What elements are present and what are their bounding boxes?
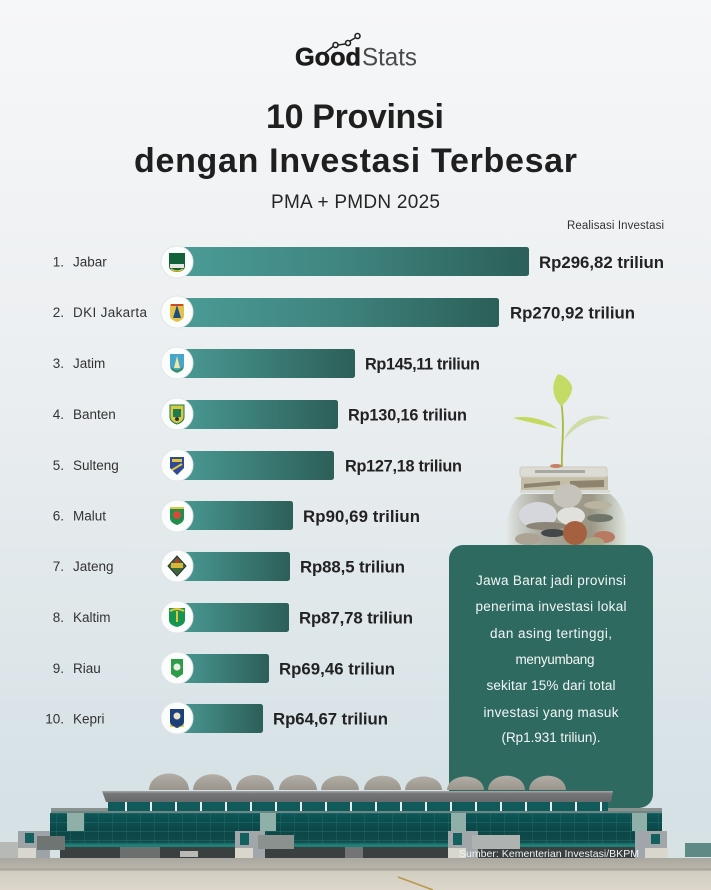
jar lid rim [520, 467, 607, 477]
row 2: DKI Jakarta: 2. [53, 305, 64, 320]
row 7: Jateng: Jateng [73, 559, 114, 574]
row 8: Kaltim: 8. [53, 610, 64, 625]
icon: Kepri emblem [170, 709, 184, 728]
plant [513, 374, 610, 467]
row 2: DKI Jakarta: DKI Jakarta [73, 305, 147, 320]
logo wordmark: Stats: Stats [362, 44, 417, 72]
row 5: Sulteng: Sulteng [73, 458, 119, 473]
glass facade [50, 813, 662, 847]
row 3: Jatim [53, 347, 480, 379]
logo: GoodStats [295, 34, 417, 72]
row 5: Sulteng: 5. [53, 458, 64, 473]
row 8: Kaltim: Rp87,78 triliun [299, 608, 413, 628]
title [134, 98, 577, 180]
row 7: Jateng: 7. [53, 559, 64, 574]
row 1: Jabar [53, 246, 664, 278]
icon: Jatim emblem [170, 354, 184, 373]
row 3: Jatim: Jatim [73, 356, 105, 371]
image: coin jar with plant [505, 374, 628, 547]
apron ground [0, 858, 711, 890]
roof domes [149, 774, 566, 790]
subtitle: PMA + PMDN 2025 [271, 192, 440, 213]
row 4: Banten: Banten [73, 407, 116, 422]
row 9: Riau: Rp69,46 triliun [279, 660, 395, 678]
bar chart [45, 246, 664, 734]
jar body [505, 494, 628, 546]
callout text: (Rp1.931 triliun). [502, 730, 600, 745]
row 9: Riau [53, 652, 395, 684]
callout text: sekitar 15% dari total [486, 678, 616, 693]
callout text: penerima investasi lokal [476, 599, 626, 614]
row 4: Banten: Rp130,16 triliun [348, 406, 467, 424]
row 6: Malut [53, 500, 420, 532]
image: airport terminal [0, 774, 711, 890]
row 8: Kaltim: Kaltim [73, 610, 111, 625]
facade pillars [67, 813, 647, 831]
callout text: investasi yang masuk [484, 705, 619, 720]
gate blocks and jet bridges [18, 831, 668, 858]
clerestory windows [108, 801, 608, 812]
row 1: Jabar: Rp296,82 triliun [539, 253, 664, 272]
side buildings [0, 842, 18, 858]
panel: Jawa Barat callout [449, 545, 653, 808]
icon: Sulteng emblem [170, 457, 184, 475]
row 4: Banten: 4. [53, 407, 64, 422]
row 7: Jateng [53, 550, 405, 582]
row 1: Jabar: Jabar [73, 254, 107, 270]
source note: Sumber: Kementerian Investasi/BKPM [459, 848, 639, 860]
icon: Riau emblem [171, 659, 183, 678]
row 1: Jabar: 1. [53, 254, 64, 270]
row 3: Jatim: Rp145,11 triliun [365, 356, 480, 374]
row 10: Kepri: Rp64,67 triliun [273, 710, 388, 728]
callout text: menyumbang [516, 652, 594, 667]
icon: Jabar emblem [169, 253, 185, 272]
icon: DKI Jakarta emblem [170, 304, 184, 322]
icon: Malut emblem [170, 507, 184, 525]
icon: Jateng emblem [168, 556, 186, 576]
row 7: Jateng: Rp88,5 triliun [300, 558, 405, 576]
jar neck with coins [521, 476, 608, 492]
title: dengan Investasi Terbesar [134, 142, 577, 180]
row 8: Kaltim [53, 601, 413, 633]
row 6: Malut: 6. [53, 508, 64, 524]
logo wordmark: Good: Good [295, 44, 361, 72]
coins [515, 486, 615, 547]
row 5: Sulteng [53, 449, 462, 481]
row 5: Sulteng: Rp127,18 triliun [345, 458, 462, 476]
row 3: Jatim: 3. [53, 356, 64, 371]
ground floor [60, 847, 665, 858]
row 6: Malut: Malut [73, 508, 106, 524]
icon: Kaltim emblem [169, 608, 185, 627]
callout text: Jawa Barat jadi provinsi [476, 573, 626, 588]
roof canopy [102, 791, 613, 802]
logo chart line icon [325, 34, 360, 53]
callout text: dan asing tertinggi, [490, 626, 612, 641]
row 2: DKI Jakarta [53, 296, 635, 328]
icon: Banten emblem [170, 405, 184, 424]
row 4: Banten [53, 398, 467, 430]
callout text [476, 573, 626, 745]
row 9: Riau: Riau [73, 661, 101, 676]
title: 10 Provinsi [266, 98, 444, 136]
row 10: Kepri: Kepri [73, 712, 105, 726]
row 10: Kepri: 10. [45, 712, 64, 726]
upper fascia band [51, 808, 662, 812]
row 10: Kepri [45, 702, 388, 734]
row 6: Malut: Rp90,69 triliun [303, 507, 420, 526]
column label: Realisasi Investasi [567, 220, 664, 232]
row 9: Riau: 9. [53, 661, 64, 676]
row 2: DKI Jakarta: Rp270,92 triliun [510, 304, 635, 322]
